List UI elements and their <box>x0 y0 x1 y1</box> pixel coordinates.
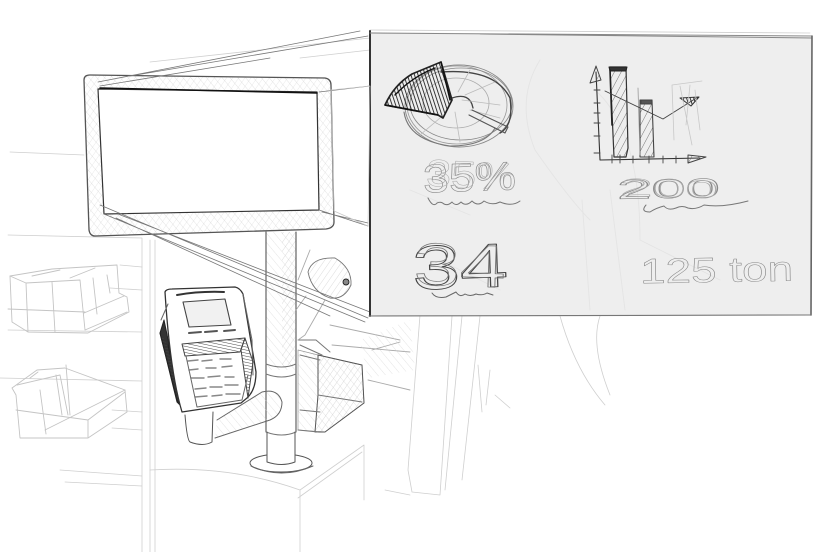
panel: infographic sheet <box>369 31 812 316</box>
stat: 35%: 35% <box>422 154 517 202</box>
stat: 200: 200 <box>617 173 720 205</box>
stat: 200 <box>617 173 748 212</box>
stand base <box>250 446 313 473</box>
sketched stand post <box>266 232 296 463</box>
monitor: left display frame <box>84 75 334 236</box>
payment terminal <box>160 287 282 444</box>
boxes on lower shelf <box>12 365 127 438</box>
panel edge shadow wedge <box>331 86 370 226</box>
stat: 34: 34 <box>411 231 509 304</box>
stat: 35%: 35% <box>425 153 517 199</box>
person behind the terminal <box>296 250 415 390</box>
projection lines to the panel <box>98 31 370 322</box>
card reader on the counter <box>298 340 364 432</box>
stat: 200: 200 <box>620 174 718 204</box>
stat: 34: 34 <box>413 230 507 301</box>
pie chart <box>385 62 513 147</box>
stat: 125 ton: 125 ton <box>640 250 793 291</box>
boxes on upper shelf <box>8 265 129 333</box>
bar chart <box>590 66 706 163</box>
